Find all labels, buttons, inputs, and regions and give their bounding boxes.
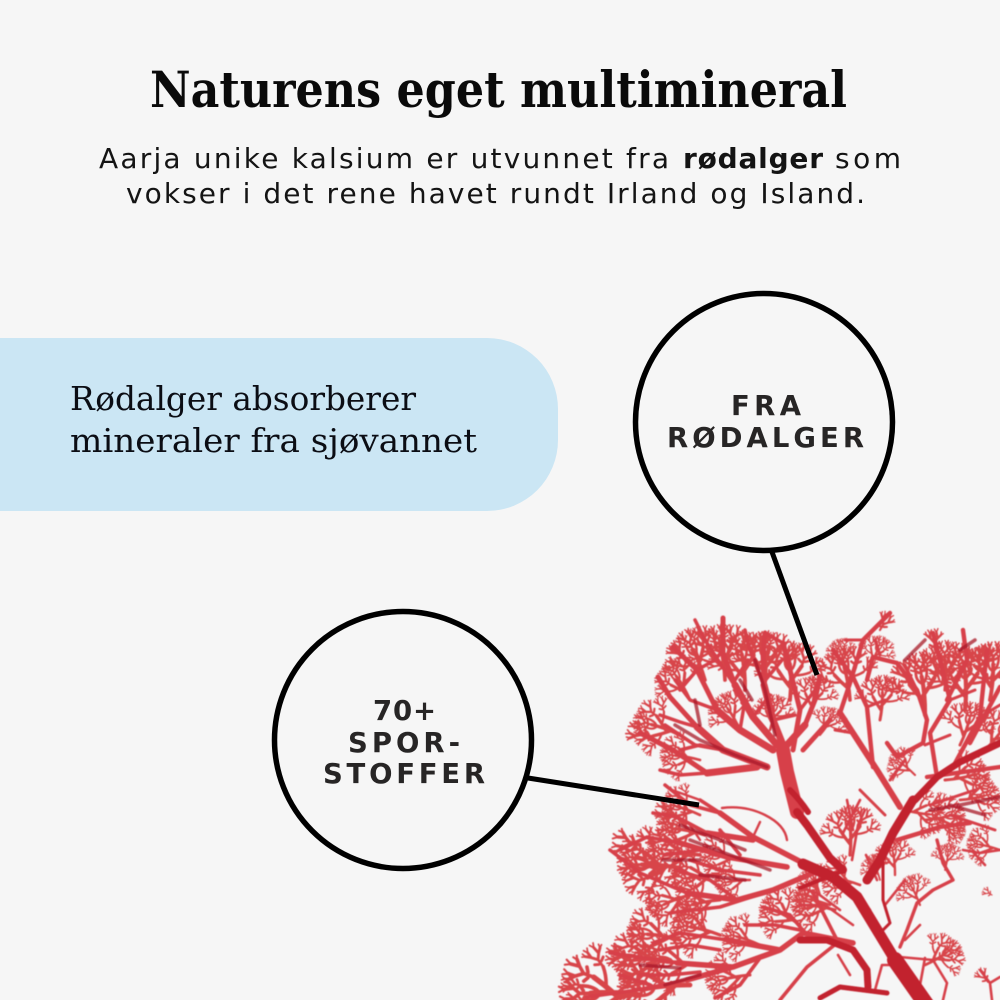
intro text: rødalger (683, 142, 823, 175)
intro text: Aarja unike kalsium er utvunnet fra (99, 142, 669, 175)
intro text (99, 142, 901, 210)
seaweed main stems (790, 743, 1000, 1000)
circle label: 70+ sporstoffer: SPOR- (348, 727, 460, 759)
seaweed fronds (557, 616, 1000, 1000)
callout text (70, 379, 477, 460)
circle label: 70+ sporstoffer (274, 612, 532, 868)
circle label: fra rødalger: FRA (731, 390, 802, 422)
circle label: fra rødalger: RØDALGER (667, 422, 864, 454)
intro text: vokser i det rene havet rundt Irland og Island. (126, 177, 865, 210)
circle label: fra rødalger (636, 294, 892, 550)
intro text: som (835, 142, 901, 175)
seaweed dark shading (640, 640, 1000, 985)
seaweed branches (587, 613, 1000, 1000)
leader line: sporstoffer (528, 778, 699, 805)
title: Naturens eget multimineral (150, 60, 847, 119)
circle label: 70+ sporstoffer: 70+ (373, 695, 436, 727)
circle label: 70+ sporstoffer: STOFFER (323, 758, 485, 790)
callout text: Rødalger absorberer (70, 379, 416, 418)
callout text: mineraler fra sjøvannet (70, 421, 477, 460)
seaweed twigs (604, 609, 996, 987)
seaweed illustration (557, 609, 1000, 1000)
leader line: fra rødalger (772, 552, 817, 675)
panel: blue callout (0, 338, 558, 511)
